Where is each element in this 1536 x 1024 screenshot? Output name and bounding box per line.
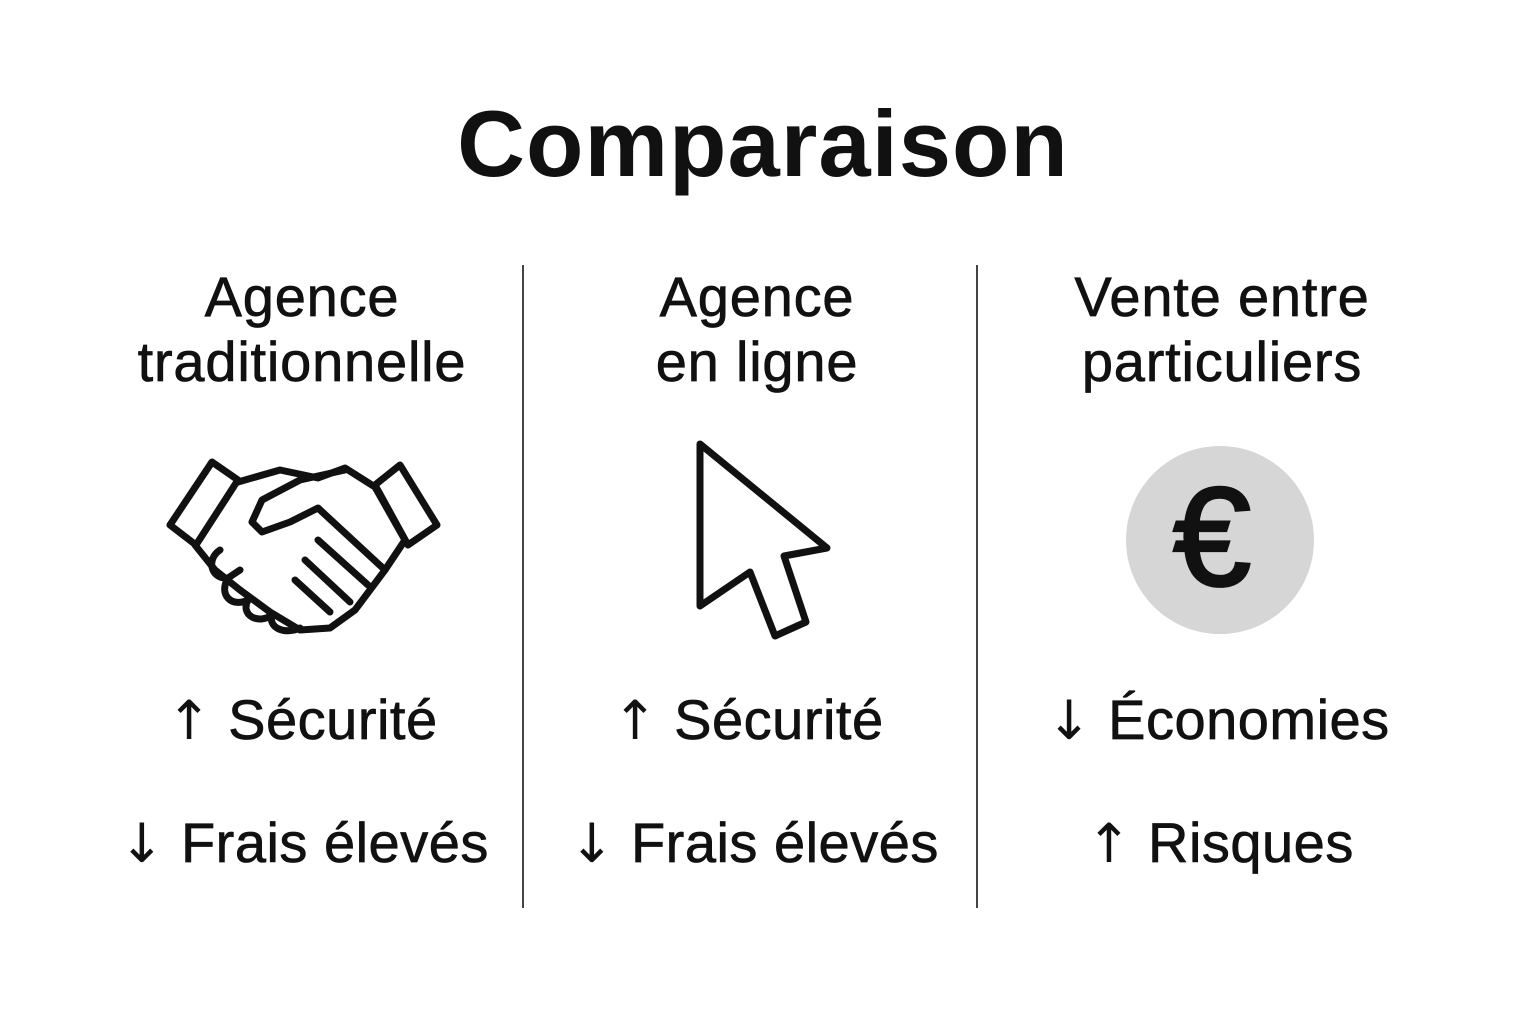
heading: agence traditionnelle — [138, 265, 466, 393]
row 1 col 2: ↑ Sécurité — [612, 688, 884, 752]
heading: vente entre particuliers: particuliers — [1082, 330, 1362, 393]
heading: vente entre particuliers: Vente entre — [1074, 265, 1370, 328]
row 1 col 3: ↓ Économies — [1046, 688, 1390, 752]
title: Comparaison — [457, 91, 1069, 196]
heading: agence en ligne — [656, 265, 858, 393]
icon: cursor — [696, 440, 830, 640]
heading: agence en ligne: en ligne — [656, 330, 858, 393]
row 2 col 1: ↓ Frais élevés — [119, 811, 489, 875]
row 2 col 3: ↑ Risques — [1086, 811, 1354, 875]
icon: euro: € — [1173, 458, 1251, 615]
row 1 col 1: ↑ Sécurité — [166, 688, 438, 752]
icon: euro — [1126, 446, 1314, 634]
row 2 col 2: ↓ Frais élevés — [569, 811, 939, 875]
heading: agence traditionnelle: traditionnelle — [138, 330, 466, 393]
heading: vente entre particuliers — [1074, 265, 1370, 393]
icon: handshake — [166, 458, 440, 634]
heading: agence traditionnelle: Agence — [205, 265, 399, 328]
heading: agence en ligne: Agence — [660, 265, 854, 328]
